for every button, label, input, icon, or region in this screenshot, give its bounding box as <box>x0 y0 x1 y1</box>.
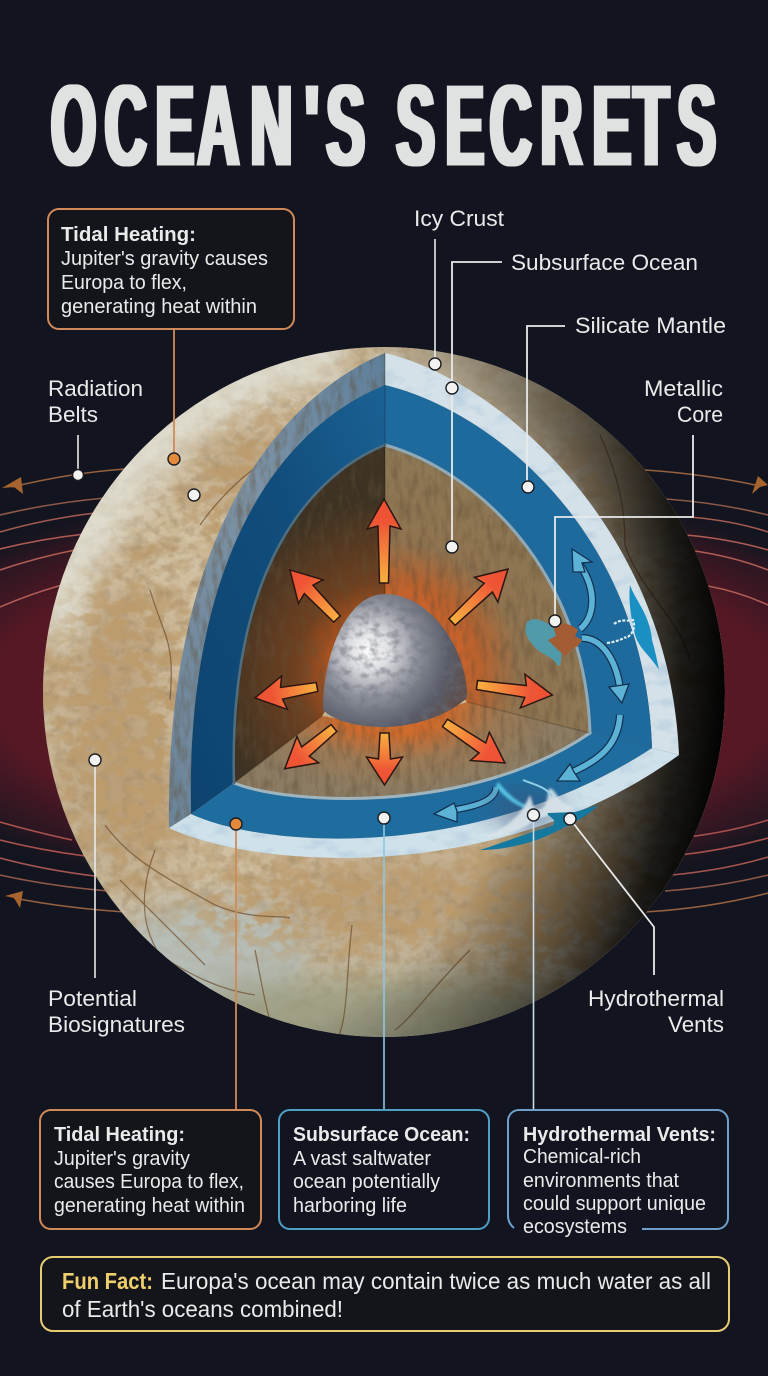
convection arrow 1 <box>572 549 592 629</box>
arrow down <box>366 733 402 785</box>
label: hydrothermal vents: Vents <box>668 1012 724 1037</box>
convection arrows in the ocean <box>434 549 629 822</box>
callout: hydrothermal vents: environments that <box>523 1169 679 1192</box>
callout: tidal heating bottom: Jupiter's gravity <box>54 1147 191 1170</box>
callout: tidal heating top: Jupiter's gravity causes <box>61 247 268 270</box>
label: radiation belts: Radiation <box>48 376 143 401</box>
floor: icy crust <box>169 748 679 858</box>
planet surface: mottled brown zones <box>75 435 610 935</box>
cyan streak <box>496 782 530 809</box>
hydrothermal plume on floor <box>480 780 598 850</box>
leader: hydrothermal vents <box>570 819 654 975</box>
leader: subsurface ocean <box>452 262 502 547</box>
rust vent rock <box>548 624 582 656</box>
left ice texture <box>165 353 387 833</box>
thin plume line <box>523 780 552 796</box>
title: OCEAN'S SECRETS <box>51 62 716 191</box>
label: metallic core: Core <box>677 402 723 427</box>
label: potential biosignatures <box>48 986 185 1037</box>
label: subsurface ocean: Subsurface Ocean <box>511 250 698 275</box>
label: silicate mantle: Silicate Mantle <box>575 313 726 338</box>
label: metallic core: Metallic <box>644 376 723 401</box>
fun fact banner: of Earth's oceans combined! <box>62 1296 343 1322</box>
cyan ice fissure <box>629 585 659 670</box>
callout: tidal heating bottom <box>40 1110 261 1229</box>
arrow down-left <box>274 715 345 782</box>
white plume <box>482 789 575 838</box>
planet Europa <box>43 347 725 1062</box>
orbit arrowheads <box>2 476 768 908</box>
white bubbles <box>607 620 634 643</box>
right wall: icy crust <box>385 353 679 755</box>
hydrothermal plume on right wall <box>526 585 659 670</box>
arrow right <box>475 668 555 712</box>
leader: tidal heating top <box>173 329 175 459</box>
right wall: mantle <box>385 445 590 733</box>
mantle boundary rim <box>234 445 590 799</box>
left wall: icy crust <box>169 353 385 828</box>
leader lines <box>78 239 693 1110</box>
left wall: mantle <box>234 445 385 783</box>
callout: hydrothermal vents: ecosystems <box>523 1215 627 1238</box>
arrow left <box>252 670 320 715</box>
leader: icy crust <box>434 239 436 364</box>
fun fact banner: Fun Fact: <box>62 1268 153 1294</box>
callout: hydrothermal vents: Chemical-rich <box>523 1145 641 1168</box>
label: metallic core <box>644 376 723 427</box>
mantle grain <box>230 445 592 810</box>
callout: subsurface ocean: Subsurface Ocean: <box>293 1123 470 1146</box>
fun fact banner <box>41 1257 729 1331</box>
planet surface: blue-grey lower-left <box>120 900 310 1010</box>
label: radiation belts <box>48 376 143 427</box>
leader: potential biosignatures <box>94 760 96 978</box>
heat arrows radiating from the core <box>252 499 555 785</box>
left wall: ocean <box>191 385 385 814</box>
planet surface: pale upper-left limb <box>52 350 340 640</box>
arrow down-right <box>436 709 514 777</box>
label: hydrothermal vents <box>588 986 724 1037</box>
teal plume <box>526 619 566 666</box>
callout: tidal heating bottom: generating heat within <box>54 1194 245 1217</box>
arrow up-right <box>440 557 520 634</box>
radiation belts glow <box>0 472 768 912</box>
leader: silicate mantle <box>527 326 565 487</box>
fun fact banner: Europa's ocean may contain twice as much water as all <box>161 1268 711 1294</box>
callout: hydrothermal vents: could support unique <box>523 1192 706 1215</box>
callout: tidal heating top: generating heat within <box>61 295 257 318</box>
leader: hydrothermal vents bottom <box>532 815 534 1110</box>
floor: mantle <box>234 702 590 799</box>
label: potential biosignatures: Biosignatures <box>48 1012 185 1037</box>
callout: tidal heating top <box>48 209 294 329</box>
radiation belt orbit lines <box>0 469 768 912</box>
leader: radiation belts <box>77 435 79 475</box>
label: potential biosignatures: Potential <box>48 986 137 1011</box>
leader: metallic core <box>555 435 693 621</box>
label: icy crust: Icy Crust <box>414 206 504 231</box>
planet surface: muted upper-right <box>393 348 622 497</box>
wall seams <box>234 353 590 783</box>
right wall: ocean <box>385 385 652 748</box>
label: hydrothermal vents: Hydrothermal <box>588 986 724 1011</box>
convection arrow 2 <box>582 638 629 703</box>
metallic core dome <box>320 592 470 730</box>
darker water around vents <box>490 794 560 822</box>
cutaway interior <box>165 353 681 883</box>
callout: tidal heating bottom: causes Europa to flex, <box>54 1170 244 1193</box>
callout: subsurface ocean: harboring life <box>293 1194 407 1217</box>
planet surface: localised brown mottling <box>44 384 620 974</box>
leader: tidal heating bottom <box>235 824 237 1110</box>
callout: subsurface ocean <box>279 1110 489 1229</box>
leader dots <box>72 358 576 830</box>
callout: hydrothermal vents <box>508 1110 728 1238</box>
arrow up-left <box>278 558 349 631</box>
planet shading <box>316 351 725 1037</box>
callout: tidal heating top: Tidal Heating: <box>61 223 196 246</box>
convection arrow 3 <box>557 715 620 781</box>
blue vent channel <box>480 805 598 850</box>
callout: hydrothermal vents: Hydrothermal Vents: <box>523 1123 716 1146</box>
floor: ocean <box>191 733 652 839</box>
ice texture <box>169 353 681 883</box>
callout: tidal heating bottom: Tidal Heating: <box>54 1123 185 1146</box>
planet surface: cracks <box>105 435 690 1050</box>
callout: subsurface ocean: ocean potentially <box>293 1170 441 1193</box>
planet surface: noise texture <box>43 347 725 1037</box>
callout: subsurface ocean: A vast saltwater <box>293 1147 431 1170</box>
label: radiation belts: Belts <box>48 402 98 427</box>
planet surface: grey-green base <box>200 968 542 1037</box>
callout: tidal heating top: Europa to flex, <box>61 271 187 294</box>
convection arrow 4 <box>434 787 496 822</box>
leader: subsurface ocean bottom <box>383 818 385 1110</box>
arrow up <box>367 499 401 583</box>
